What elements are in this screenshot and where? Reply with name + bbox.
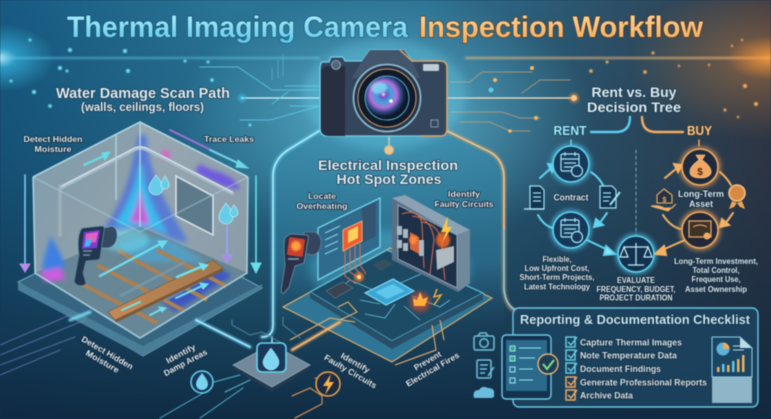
hub: central water and power node [0,312,461,418]
icon: lightning bolt circle [316,372,340,396]
moisture stains [40,135,240,312]
checklist items: Generate Professional Reports [580,378,707,388]
icon: calendar top [553,146,589,182]
icon: calendar bottom [553,212,589,248]
chips [326,259,414,305]
label: detect hidden moisture: Moisture [34,144,72,154]
icon: water drop circle [191,371,213,393]
heading: rent vs buy decision tree: Rent vs. Buy [592,84,677,100]
label: detect hidden moisture on floor: Detect Hidden [80,334,135,372]
text: evaluate: FREQUENCY, BUDGET, [596,284,676,294]
heading: rent vs buy decision tree: Decision Tree [587,99,681,115]
wires under platform [290,302,444,365]
label: identify damp areas: Damp Areas [162,347,209,378]
label: long-term asset: Asset [689,199,713,209]
title: Thermal Imaging Camera [67,11,408,44]
icon: balance scales [618,236,654,272]
icon: money bag: $ [697,167,703,178]
label: detect hidden moisture: Detect Hidden [24,134,82,144]
decorative particles [10,38,758,126]
icon: document left [524,186,544,209]
label: identify faulty circuits on floor: Identify [339,350,372,375]
icon: notepad [477,360,494,378]
hub plate [233,344,310,392]
floor slab [18,222,262,356]
checklist items: Capture Thermal Images [580,338,682,348]
label: locate overheating: Locate [308,191,336,201]
window [176,176,213,235]
heading: electrical inspection hot spot zones: Electrical Inspection [318,157,458,173]
text: buy benefits: Long-Term Investment, [674,256,758,266]
tablet with checklist [502,335,558,399]
icon: thermal camera gun [74,226,149,286]
text: rent benefits: Short-Term Projects, [520,272,594,282]
panel: electrical hot spot zones [281,189,494,365]
text: buy benefits: Asset Ownership [685,284,747,294]
electrical zone backdrop [273,131,504,320]
text: buy benefits [674,256,758,294]
title: Inspection Workflow [419,11,704,44]
floor joists and plank [80,250,226,323]
circle glows [553,146,718,272]
label: long-term asset [678,189,724,209]
text: rent benefits: Flexible, [542,254,572,264]
label: contract: Contract [554,192,588,202]
text: buy benefits: Frequent Use, [692,274,740,284]
label: identify damp areas: Identify [164,341,197,366]
heading: water damage scan path [56,86,230,114]
water drops [149,175,238,224]
panel: reporting and documentation checklist [474,308,758,407]
checklist items [566,337,707,402]
panel: water damage room [18,122,262,356]
icon: camera outline [474,333,494,350]
text: rent benefits: Latest Technology [524,282,590,292]
room walls [33,122,248,338]
base platform [283,230,492,362]
connector: camera to electrical and hub frame [262,131,516,337]
label: locate overheating: Overheating [296,201,348,211]
heading: rent vs buy decision tree [587,84,681,115]
heading: water damage scan path: (walls, ceilings, floors) [81,102,204,114]
label: trace leaks: Trace Leaks [204,134,254,144]
checklist items: Document Findings [580,364,661,375]
label: identify faulty circuits on floor: Faulty Circuits [322,352,379,391]
camera [303,40,467,150]
icon: certificate [682,212,718,248]
screen panel [318,198,380,284]
label: detect hidden moisture on floor: Moisture [84,348,121,375]
heading: water damage scan path: Water Damage Scan Path [56,86,230,102]
connector: right beam from camera to rent vs buy heading [447,66,581,133]
text: buy benefits: Total Control, [692,265,740,275]
text: evaluate [596,275,676,302]
label: long-term asset: Long-Term [678,189,724,199]
text: rent benefits: Low Upfront Cost, [524,263,590,273]
electrical cabinet [392,195,470,292]
icon: document with pen right [600,186,620,208]
scan arrows [20,130,261,315]
label: identify faulty circuits [434,189,494,209]
heading: electrical inspection hot spot zones [318,157,458,187]
text: rent benefits [520,254,594,292]
label: rent: RENT [554,124,587,138]
connector: left beam from camera to water damage heading [200,54,320,120]
title [67,11,704,44]
hot spot sparks [410,289,441,312]
icon: money bag [682,149,718,185]
checklist items: Note Temperature Data [580,350,678,362]
label: buy: BUY [687,124,713,138]
pipe [60,147,232,235]
checklist items: Archive Data [580,390,634,402]
checklist heading: Reporting & Documentation Checklist [520,313,751,327]
flow lines [0,312,340,418]
heading: electrical inspection hot spot zones: Hot Spot Zones [336,171,442,187]
label: prevent electrical fires: Prevent [412,349,443,372]
label: detect hidden moisture [24,134,82,154]
circuit board traces [338,270,450,320]
label: locate overheating [296,191,348,211]
text: evaluate: PROJECT DURATION [600,292,672,302]
label: identify faulty circuits: Faulty Circuits [434,199,494,209]
icon: cloud [474,387,494,398]
label: prevent electrical fires: Electrical Fires [404,350,461,389]
glass frame [33,122,248,338]
icon: thermal camera gun with hot screen [281,232,321,293]
icon: medal [729,185,745,209]
rent cycle arrows [538,164,615,255]
tree connectors [571,117,699,240]
label: identify faulty circuits: Identify [448,189,480,199]
icon: report document with charts [712,337,752,403]
panel: rent vs buy decision tree [520,117,758,302]
buy cycle arrows [655,164,733,255]
icon: house in hand [651,189,676,211]
icon: house in hand: $ [663,197,667,204]
icon: water drop tile [257,343,286,372]
text: evaluate: EVALUATE [617,275,655,285]
